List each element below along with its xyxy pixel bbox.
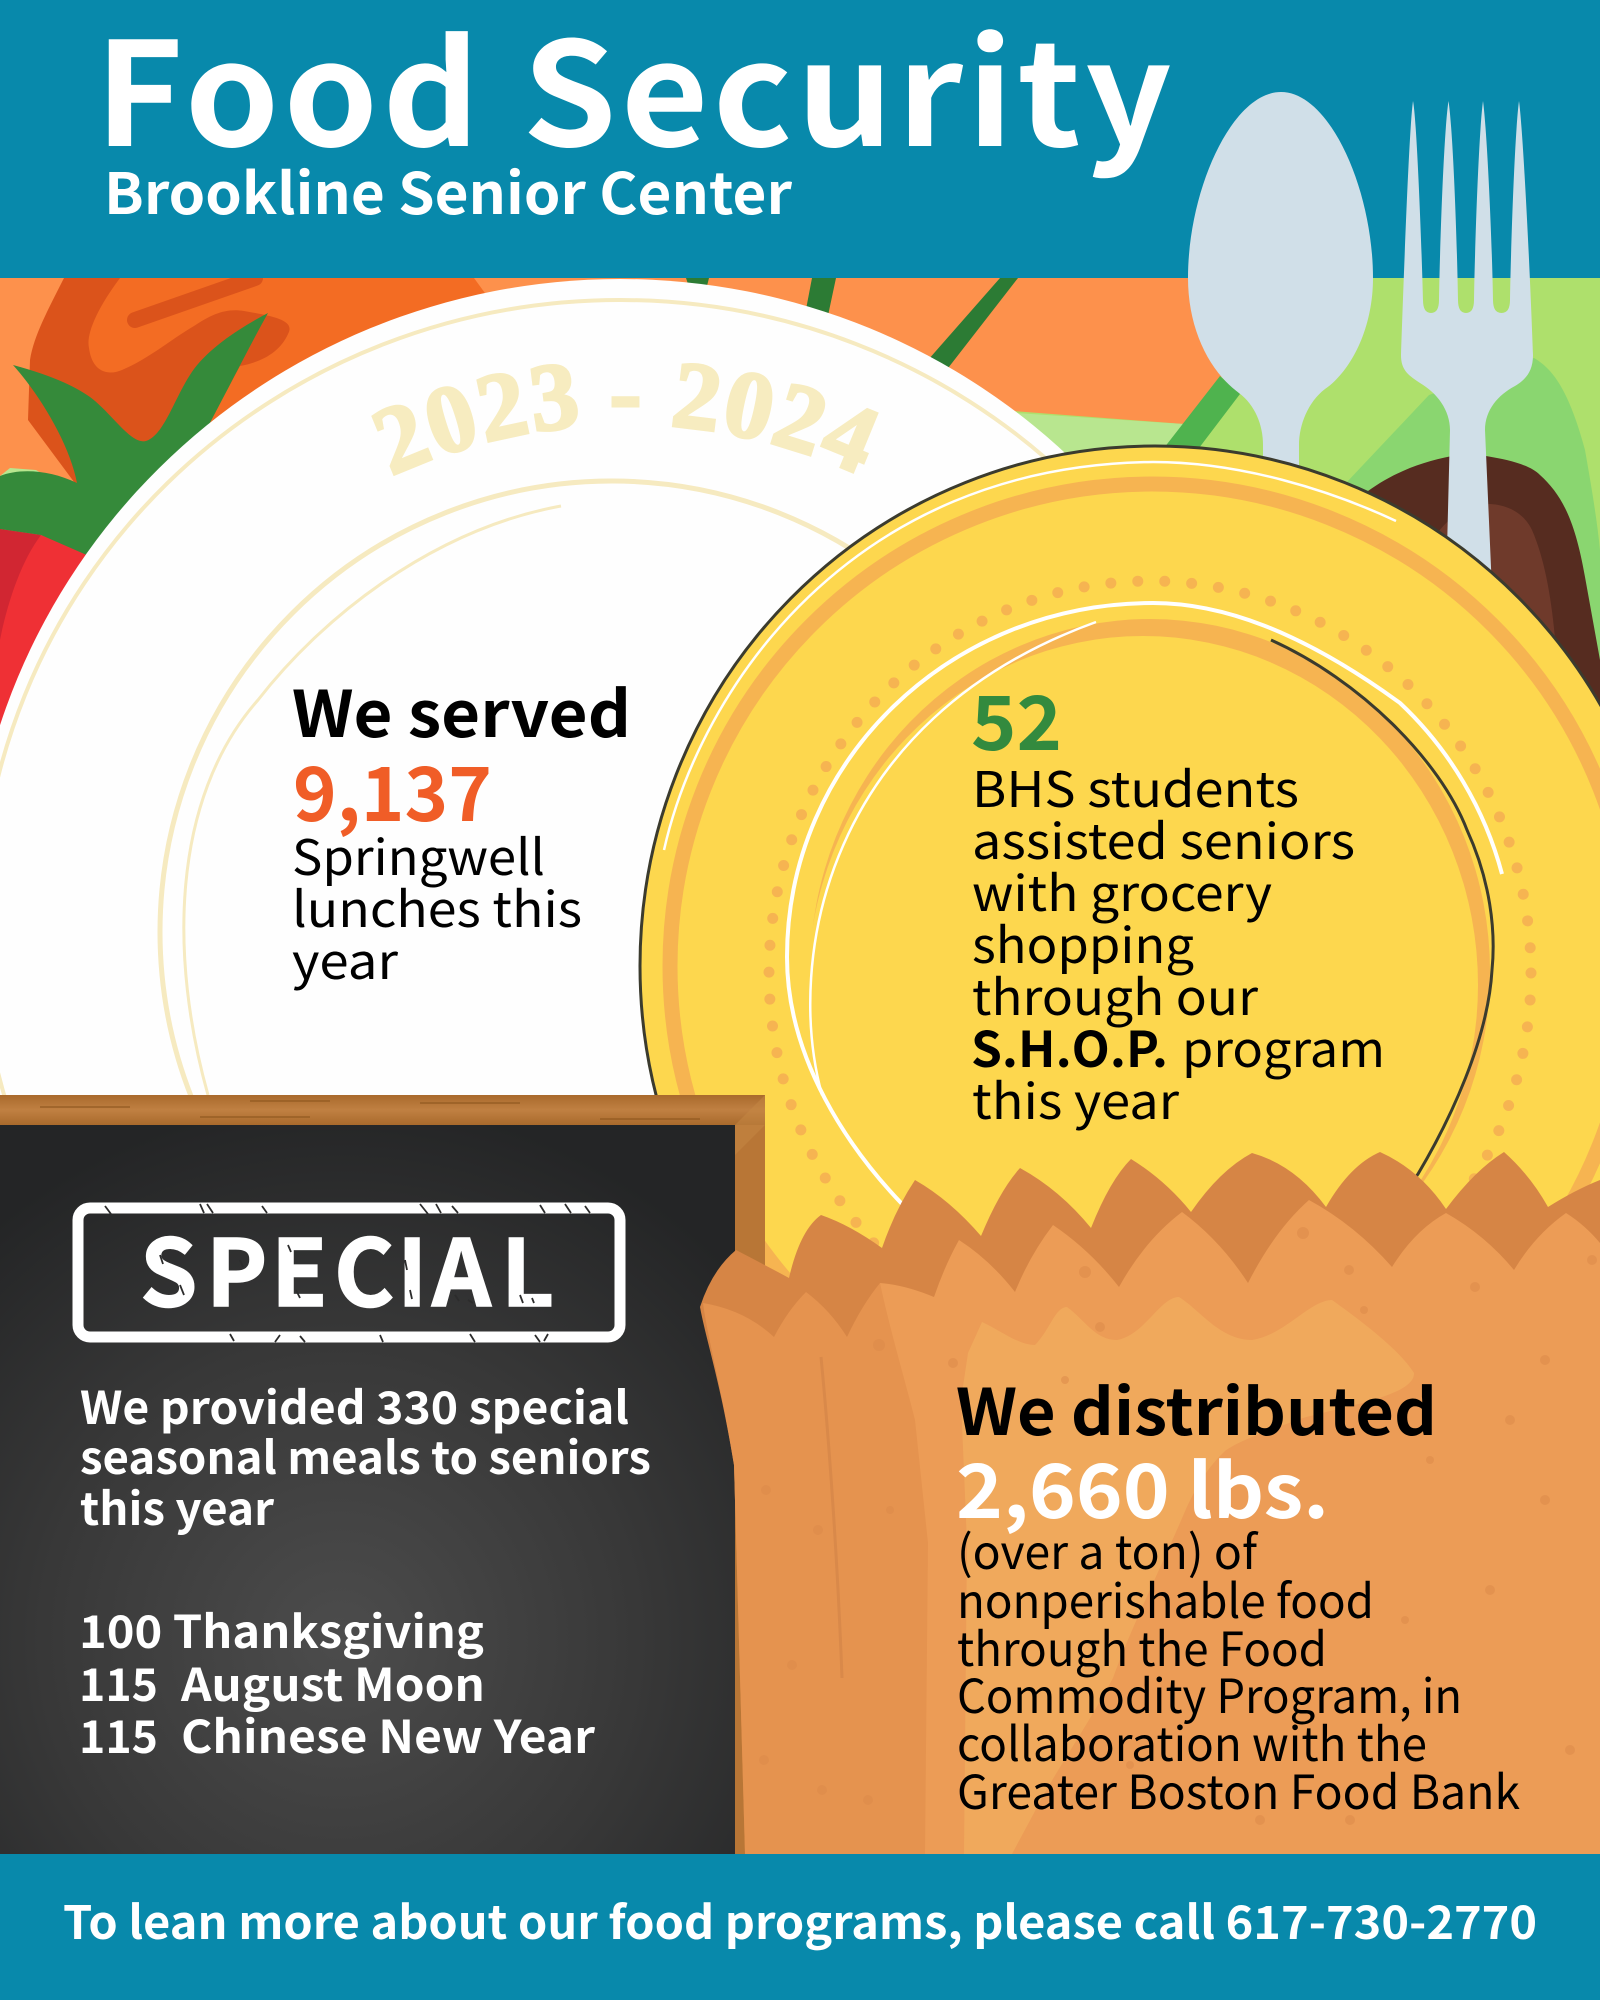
distributed stat text: collaboration with the [957, 1706, 1427, 1775]
lunches stat text: We served [292, 664, 631, 756]
students stat text: shopping [972, 907, 1194, 978]
meals stat text: Chinese New Year [181, 1701, 595, 1766]
plate year label [371, 363, 879, 476]
illustrated background: vegetables and table [0, 278, 1600, 1178]
icon: chocolate shape [1364, 456, 1600, 800]
panel: paper bag [700, 1152, 1600, 1854]
meals stat text: this year [80, 1473, 274, 1538]
students stat text: 52 [971, 663, 1062, 772]
students stat text: through our [972, 959, 1259, 1030]
wooden frame [0, 1095, 765, 1855]
meals stat text: 100 Thanksgiving [79, 1596, 484, 1661]
students stat text: assisted seniors [972, 803, 1355, 874]
distributed stat text: 2,660 lbs. [956, 1431, 1329, 1540]
subtitle: Brookline Senior Center [104, 149, 792, 231]
meals stat text: 115 [79, 1701, 158, 1766]
icon: fork [1401, 101, 1533, 590]
students stat text: S.H.O.P. [971, 1011, 1168, 1082]
panel: yellow plate [640, 446, 1600, 1486]
lunches stat text [292, 664, 631, 994]
lunches stat text: 9,137 [293, 734, 492, 843]
distributed stat text: We distributed [956, 1362, 1437, 1454]
lunches stat text: Springwell [292, 819, 545, 890]
dotted plate ring [769, 581, 1531, 1365]
meals stat text: We provided 330 special [80, 1372, 629, 1437]
lunches stat text: year [292, 923, 399, 994]
distributed stat text: through the Food [957, 1611, 1327, 1680]
distributed stat text: Greater Boston Food Bank [957, 1754, 1520, 1823]
distributed stat text [956, 1362, 1520, 1823]
footer band [0, 1854, 1600, 2000]
students stat text: BHS students [972, 751, 1299, 822]
distributed stat text: nonperishable food [957, 1563, 1374, 1632]
icon: spoon [1188, 92, 1373, 490]
plate year label: 2023 - 2024 [371, 363, 879, 476]
meals stat text: seasonal meals to seniors [80, 1422, 651, 1487]
lunches stat text: lunches this [292, 871, 582, 942]
distributed stat text: (over a ton) of [957, 1514, 1259, 1583]
footer call to action: To lean more about our food programs, please call 617-730-2770 [63, 1887, 1537, 1953]
meals stat text: August Moon [180, 1649, 485, 1714]
header band [0, 0, 1600, 278]
icon: leaf [1330, 358, 1600, 800]
distributed stat text: Commodity Program, in [957, 1658, 1462, 1727]
icon: carrot [28, 278, 490, 490]
meals stat text [79, 1372, 651, 1766]
icon: green stems [686, 278, 1018, 372]
SPECIAL stamp: SPECIAL [140, 1200, 554, 1333]
students stat text: this year [972, 1063, 1180, 1134]
panel: chalkboard [0, 1095, 765, 1855]
panel: white plate [0, 279, 1064, 1095]
students stat text: program [1182, 1011, 1385, 1082]
meals stat text: 115 [79, 1649, 158, 1714]
students stat text [971, 663, 1385, 1134]
icon: tomato [0, 313, 268, 760]
students stat text: with grocery [972, 855, 1272, 926]
